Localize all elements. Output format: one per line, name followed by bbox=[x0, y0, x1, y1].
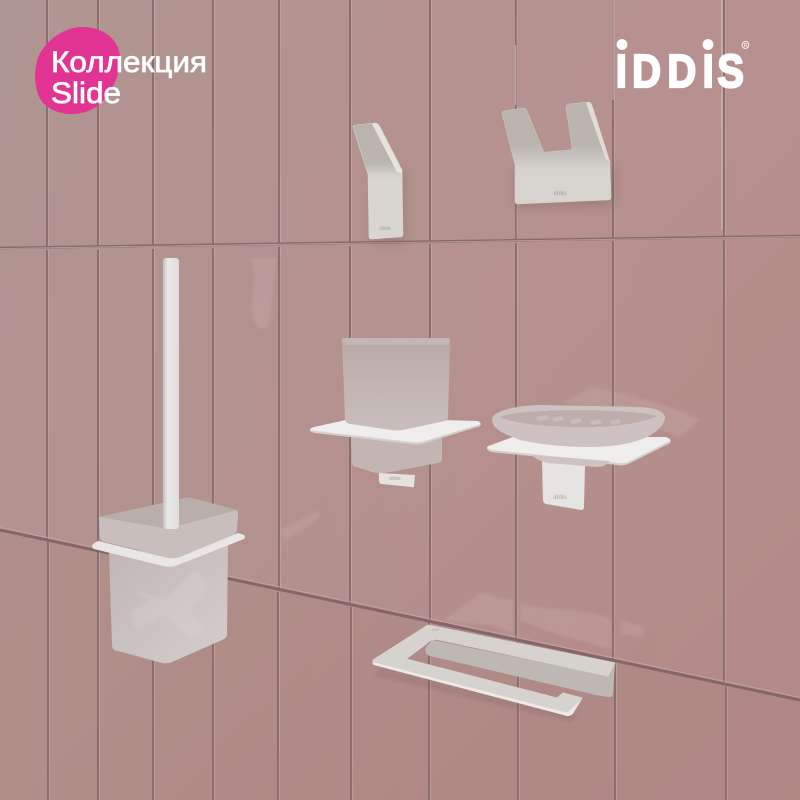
logo: IDDIS: IDDIS bbox=[616, 46, 744, 98]
handle bbox=[163, 258, 179, 529]
badge: collection name bbox=[35, 27, 207, 114]
glass tumbler bbox=[342, 338, 450, 430]
frame bbox=[373, 625, 615, 715]
mounting plate bbox=[310, 420, 481, 444]
mounting plate bbox=[92, 533, 245, 567]
lower part of glass bbox=[351, 437, 442, 473]
single hook bbox=[353, 123, 405, 243]
soap dish bbox=[487, 405, 670, 510]
wall plate bbox=[425, 640, 615, 697]
wall bracket bbox=[542, 461, 585, 510]
shadow bbox=[375, 668, 580, 722]
toilet brush holder bbox=[92, 258, 245, 663]
frosted dish bbox=[492, 405, 665, 447]
frame front edge bbox=[373, 662, 581, 716]
towel holder bbox=[373, 625, 615, 722]
tumbler holder: iddis bbox=[389, 476, 401, 482]
logo: IDDIS: R bbox=[744, 43, 748, 49]
collection title: Коллекция bbox=[51, 46, 207, 79]
soap dish: iddis bbox=[553, 494, 567, 501]
brush bristles bbox=[130, 570, 210, 640]
towel holder: iddis bbox=[432, 628, 439, 632]
wall tab bbox=[379, 473, 415, 487]
single hook: iddis bbox=[379, 226, 391, 232]
mounting plate bbox=[487, 437, 670, 465]
lid bbox=[99, 498, 238, 558]
glass container bbox=[109, 545, 228, 663]
tumbler holder bbox=[310, 338, 481, 487]
double hook: iddis bbox=[554, 191, 566, 197]
double hook bbox=[502, 102, 615, 208]
collection subtitle: Slide bbox=[51, 77, 121, 110]
pink blob bbox=[35, 27, 120, 114]
